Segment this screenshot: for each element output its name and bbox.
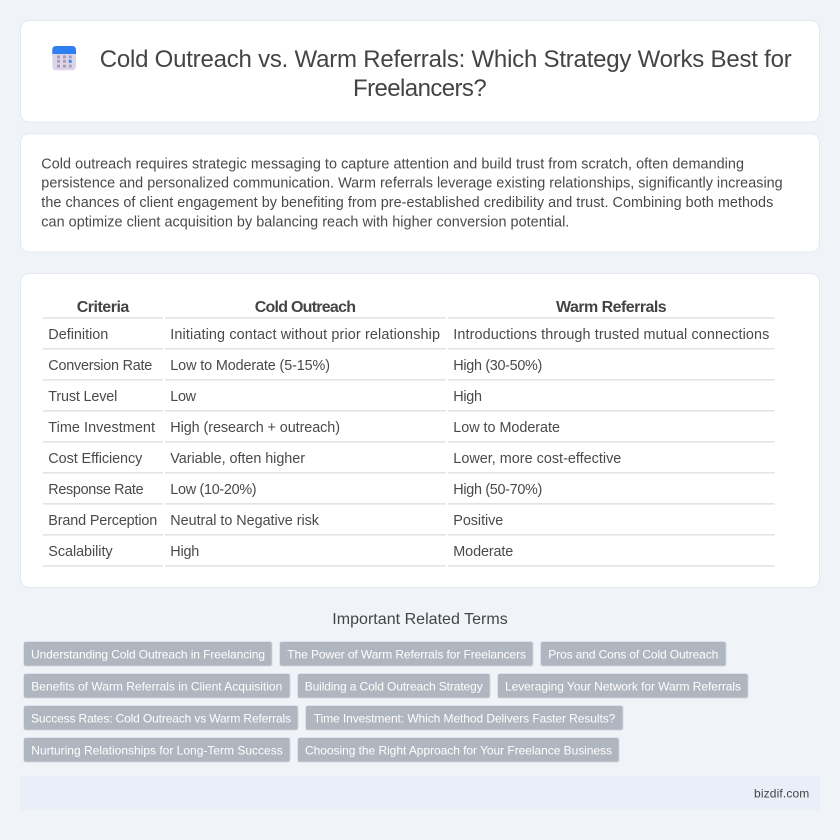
row: brand perception: Brand Perception xyxy=(48,513,157,529)
chip xyxy=(24,738,290,762)
chip xyxy=(298,674,490,698)
chip: Nurturing Relationships for Long-Term Success xyxy=(31,743,283,757)
chip xyxy=(24,674,290,698)
chip xyxy=(306,706,623,730)
chip: Benefits of Warm Referrals in Client Acquisition xyxy=(31,679,282,693)
row: definition: Introductions through trusted mutual connections xyxy=(453,327,769,343)
chip: The Power of Warm Referrals for Freelancers xyxy=(287,647,526,661)
chip: Building a Cold Outreach Strategy xyxy=(305,679,483,693)
row: scalability: High xyxy=(170,544,199,560)
icon: calendar xyxy=(52,46,76,70)
row: conversion rate: Low to Moderate (5-15%) xyxy=(170,358,330,374)
intro text block: persistence and personalized communication. Warm referrals leverage existing relationships, significantly increasing xyxy=(41,176,783,192)
row: definition xyxy=(48,327,769,343)
table header: Criteria xyxy=(77,299,129,316)
chip: Understanding Cold Outreach in Freelancing xyxy=(31,647,265,661)
row: trust level: High xyxy=(453,389,482,405)
row: trust level: Low xyxy=(170,389,197,405)
row: time investment: High (research + outreach) xyxy=(170,420,340,436)
row: scalability xyxy=(48,544,513,560)
row: definition: Definition xyxy=(48,327,108,343)
chip: Pros and Cons of Cold Outreach xyxy=(548,647,718,661)
footer site name: bizdif.com xyxy=(754,786,809,800)
chip xyxy=(24,642,272,666)
row: cost efficiency: Lower, more cost-effective xyxy=(453,451,621,467)
heading: important related terms: Important Related Terms xyxy=(332,611,508,628)
row: cost efficiency: Variable, often higher xyxy=(170,451,305,467)
chip xyxy=(298,738,619,762)
row: conversion rate: Conversion Rate xyxy=(48,358,152,374)
row: conversion rate: High (30-50%) xyxy=(453,358,542,374)
panel: header xyxy=(20,20,820,122)
table header xyxy=(77,299,667,316)
panel: comparison table xyxy=(20,274,820,588)
row: cost efficiency: Cost Efficiency xyxy=(48,451,143,467)
intro text block: can optimize client acquisition by balancing reach with higher conversion potential. xyxy=(41,214,569,230)
panel: introduction xyxy=(20,134,820,252)
chip: Choosing the Right Approach for Your Freelance Business xyxy=(305,743,612,757)
row: time investment xyxy=(48,420,560,436)
chip: Success Rates: Cold Outreach vs Warm Referrals xyxy=(31,711,291,725)
table row lines xyxy=(43,317,775,566)
row: scalability: Moderate xyxy=(453,544,513,560)
footer xyxy=(20,776,820,810)
row: response rate: High (50-70%) xyxy=(453,482,542,498)
row: conversion rate xyxy=(48,358,542,374)
title xyxy=(100,46,792,102)
row: response rate: Low (10-20%) xyxy=(170,482,257,498)
intro text block xyxy=(41,156,783,230)
chip: Leveraging Your Network for Warm Referrals xyxy=(505,679,741,693)
panel: related term chips xyxy=(24,642,748,762)
chip: Time Investment: Which Method Delivers Faster Results? xyxy=(314,711,616,725)
chip xyxy=(280,642,533,666)
row: definition: Initiating contact without prior relationship xyxy=(170,327,440,343)
row: brand perception: Positive xyxy=(453,513,503,529)
title: Cold Outreach vs. Warm Referrals: Which Strategy Works Best for xyxy=(100,46,792,73)
table header: Warm Referrals xyxy=(556,299,667,316)
chip xyxy=(540,642,726,666)
intro text block: Cold outreach requires strategic messaging to capture attention and build trust from scratch, often demanding xyxy=(41,156,744,172)
row: time investment: Low to Moderate xyxy=(453,420,560,436)
row: brand perception xyxy=(48,513,503,529)
row: scalability: Scalability xyxy=(48,544,113,560)
row: brand perception: Neutral to Negative risk xyxy=(170,513,320,529)
row: trust level xyxy=(48,389,482,405)
intro text block: the chances of client engagement by benefiting from pre-established credibility and trust. Combining both methods xyxy=(41,195,773,211)
row: time investment: Time Investment xyxy=(48,420,155,436)
row: cost efficiency xyxy=(48,451,621,467)
title: Freelancers? xyxy=(353,75,487,102)
chip xyxy=(24,706,298,730)
chip xyxy=(498,674,748,698)
table header: Cold Outreach xyxy=(255,299,356,316)
row: trust level: Trust Level xyxy=(48,389,117,405)
row: response rate: Response Rate xyxy=(48,482,144,498)
row: response rate xyxy=(48,482,542,498)
